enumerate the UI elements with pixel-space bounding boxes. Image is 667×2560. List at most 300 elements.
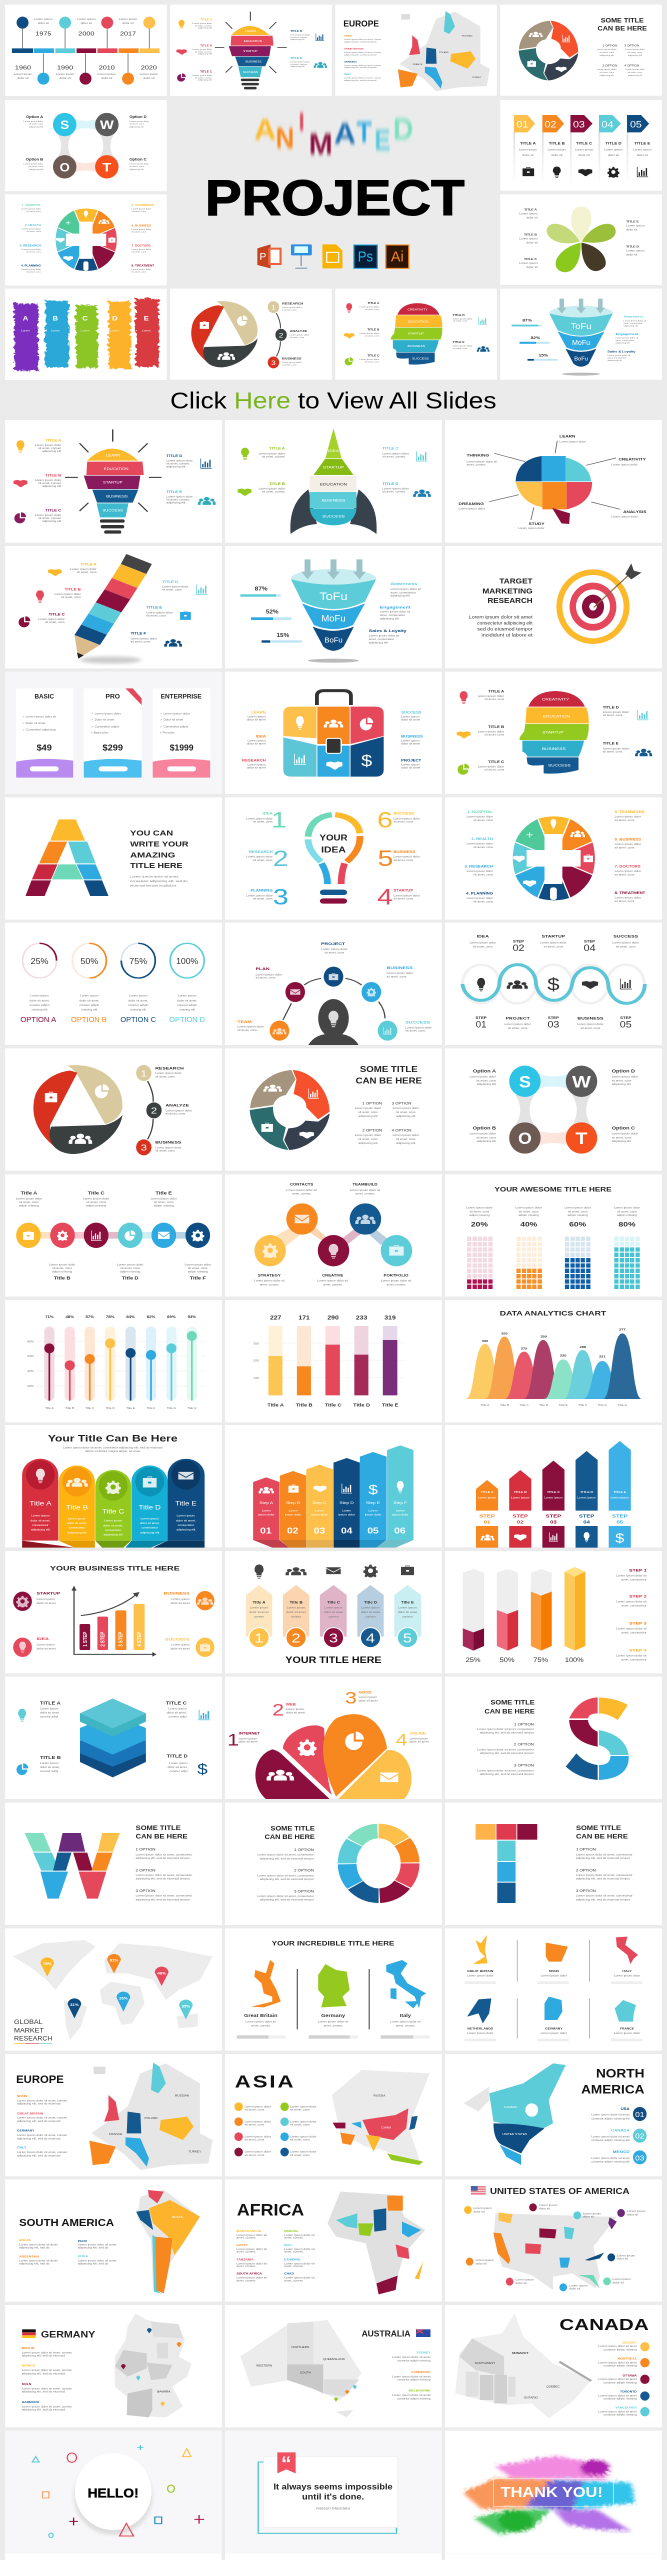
panel: petal diagram slide: Lorem ipsum xyxy=(519,261,538,265)
panel: 3D percentage bars: amet, consectetur xyxy=(621,1631,647,1634)
panel: ascending step columns: Step B xyxy=(286,1501,300,1505)
panel: your idea bulb: Lorem ipsum dolor xyxy=(246,817,273,820)
panel: wave steps: 02 xyxy=(513,943,525,954)
panel: rising arrows: 04 xyxy=(583,1520,590,1525)
panel: pricing table xyxy=(5,672,222,794)
panel: business growth chart: SUCCESS xyxy=(165,1637,190,1641)
panel: wave steps: STEP xyxy=(476,1016,487,1020)
growth chart: 1 STEP xyxy=(82,1631,89,1647)
panel: rounded tab columns: consectetur xyxy=(105,1528,121,1532)
panel: numbered arrow columns slide: 01 xyxy=(516,119,528,130)
panel: chain of circles: Title E xyxy=(156,1191,173,1196)
panel: rising arrows: $ xyxy=(615,1532,624,1546)
panel: person with idea arc xyxy=(225,923,442,1045)
panel: SWOT: T xyxy=(576,1130,588,1148)
panel: numbered arrow columns slide: 03 xyxy=(573,119,585,130)
legend: sit amet, cons xyxy=(245,2108,265,2112)
panel: ascending step columns: Lorem xyxy=(342,1509,352,1512)
panel: Canada map: TORONTO xyxy=(620,2390,637,2394)
state badges: dolor sit xyxy=(613,2281,624,2284)
panel: linked circles: amet, consec xyxy=(387,1283,406,1286)
panel: ascending step columns: ipsum dolor xyxy=(365,1513,381,1516)
panel: person with idea arc: sit amet, cons xyxy=(325,951,345,954)
panel: ascending step columns: Step D xyxy=(340,1501,354,1505)
panel: Europe map: GERMANY xyxy=(17,2129,34,2133)
panel: letter W infographic: adipiscing elit, sed do eiusmod tempor xyxy=(136,1856,190,1860)
panel: pencil infographic: Lorem ipsum dolor xyxy=(146,611,173,614)
panel: wave steps: Lorem ipsum dolor xyxy=(505,1022,531,1026)
growth chart: 3 STEP xyxy=(118,1631,125,1647)
panel: timeline slide: 2010 xyxy=(99,65,115,71)
Asia map shapes xyxy=(332,2070,430,2165)
panel: timeline slide: 2017 xyxy=(120,31,137,37)
panel: medical cross wheel: 8. TREATMENT xyxy=(615,891,646,895)
panel: three country maps: amet, consec xyxy=(251,2024,271,2027)
panel: letter S infographic: adipiscing elit, sed do eiusmod tempor xyxy=(480,1772,534,1776)
panel: timeline slide: dolor sit xyxy=(81,21,92,25)
panel: Africa map: AFRICA xyxy=(237,2202,304,2220)
panel: rising arrows: 02 xyxy=(517,1520,524,1525)
panel: triangle circle infographic: sit amet, cons xyxy=(155,1149,176,1153)
panel: numbered pentagon tabs: conetur xyxy=(328,1615,339,1618)
panel: target marketing research: sed do eiusmod tempor xyxy=(477,627,533,632)
panel: marketing funnel infographic: Lorem ipsum dolor sit xyxy=(380,610,411,614)
panel: rounded tab columns: adipiscing elit xyxy=(140,1531,160,1534)
panel: linked circles: Lorem ipsum dolor sit xyxy=(317,1279,348,1283)
next row sliver xyxy=(5,2547,661,2560)
panel: percentage rings: conetur adipin xyxy=(177,1003,198,1007)
panel: person with idea arc: sit amet, cons xyxy=(387,975,407,978)
panel: Germany map: BERLIN xyxy=(22,2346,34,2350)
panel: letter S infographic: Lorem ipsum dolor sit amet, consectetur xyxy=(477,1727,534,1731)
panel: rising arrows: TITLE A xyxy=(481,1490,494,1494)
panel: 3D percentage bars: Lorem ipsum dolor sit xyxy=(616,1654,647,1657)
panel: triangle circle infographic: ANALYZE xyxy=(165,1103,189,1108)
panel: ascending step columns: $ xyxy=(368,1483,378,1497)
panel: percentage rings: conetur adipin xyxy=(79,1003,100,1007)
panel: North America map: CANADA xyxy=(611,2129,630,2132)
North America map shapes: CANADA xyxy=(504,2105,517,2109)
panel: letter W infographic: 2 OPTION xyxy=(136,1869,156,1872)
panel: cloud petals: Lorem ipsum xyxy=(410,1737,429,1740)
panel: ascending step columns: 01 xyxy=(260,1526,272,1535)
panel: wave steps: IDEA xyxy=(477,934,490,939)
panel: six country maps: GERMANY xyxy=(545,2027,563,2030)
panel: Germany map: adipiscing elit, sed do eiusmod xyxy=(22,2390,65,2394)
panel: Africa map: amet, consec xyxy=(284,2236,304,2240)
panel: segmented donut: sit amet, cons xyxy=(396,1110,416,1114)
panel: numbered pentagon tabs: YOUR TITLE HERE xyxy=(285,1656,382,1666)
growth chart: 2 STEP xyxy=(100,1631,107,1647)
section: slides rows 5 to 8 xyxy=(5,923,662,1422)
panel: letter S infographic: CAN BE HERE xyxy=(485,1709,535,1715)
panel: light bulb infographic: adipiscing elit xyxy=(42,519,61,523)
panel: bar chart: 227 xyxy=(270,1315,282,1321)
small maps xyxy=(467,1935,638,2023)
panel: human head infographic: sit amet, cons xyxy=(484,768,505,772)
map pins xyxy=(40,1954,193,2019)
panel: quote slide: It always seems impossible xyxy=(274,2482,393,2491)
bulb shape: BUSINESS xyxy=(106,495,128,498)
panel: paint brush columns slide: C xyxy=(82,316,88,322)
head xyxy=(519,691,589,774)
panel: rocket infographic: TITLE B xyxy=(269,482,285,486)
head: CREATIVITY xyxy=(542,697,569,702)
panel: pricing table: $49 xyxy=(37,744,52,752)
panel: rounded tab columns: consectetur xyxy=(141,1526,158,1530)
North America map shapes: UNITED STATES xyxy=(502,2132,527,2136)
map pins: 35% xyxy=(182,2005,191,2008)
panel: segmented donut: Lorem ipsum dolor xyxy=(393,1133,419,1137)
head: STARTUP xyxy=(542,730,564,734)
heading: ANIMATED blurred letters xyxy=(254,109,413,160)
panel: Africa map: amet, consec xyxy=(284,2279,304,2282)
panel: human head infographic: TITLE D xyxy=(603,706,619,709)
panel: rounded tab columns: Title E xyxy=(175,1500,197,1507)
panel: Australia map: MELBOURNE xyxy=(409,2389,430,2393)
panel: North America map: consetur adipin missing elit xyxy=(591,2138,630,2142)
heading: ANIMATED blurred letters: A xyxy=(254,113,276,145)
panel: medical cross wheel: Lorem ipsum dolor xyxy=(615,815,641,819)
panel: pricing table: ✓ Consetetur adipis xyxy=(160,725,189,728)
panel: ascending step columns: ipsum dolor xyxy=(338,1513,355,1516)
panel: letter O ring: 3 OPTION xyxy=(294,1890,314,1893)
panel: percentage rings: missing elit xyxy=(81,1008,97,1012)
panel: rocket infographic: TITLE A xyxy=(269,447,285,451)
panel: puzzle brain infographic: amet, consec xyxy=(467,463,486,466)
panel: pencil infographic: TITLE E xyxy=(146,606,163,610)
panel: SWOT: Lorem ipsum dolor xyxy=(470,1075,496,1079)
panel: rounded tab columns: adipiscing elit xyxy=(176,1528,196,1532)
panel: petal diagram slide: dolor sit xyxy=(626,253,638,257)
panel: human head infographic: sit amet, cons xyxy=(484,733,505,737)
Europe map shapes xyxy=(89,2063,213,2170)
panel: pencil infographic: Lorem ipsum dolor xyxy=(54,592,81,596)
panel: Africa map: SOUTH AFRICA xyxy=(237,2272,263,2276)
heading: ANIMATED blurred letters: A xyxy=(334,117,356,149)
state badges xyxy=(464,2203,646,2291)
panel: waffle percentages: Lorem ipsum dolor xyxy=(516,1206,542,1210)
panel: waffle percentages: sit amet, cons xyxy=(470,1210,490,1213)
panel: marketing funnel infographic: amet, consectetur xyxy=(369,637,394,641)
panel: triangle circle infographic: 3 xyxy=(141,1144,147,1153)
panel: letter W infographic: adipiscing elit, sed do eiusmod tempor xyxy=(136,1877,190,1881)
panel: marketing funnel infographic: adipiscing elit xyxy=(369,641,388,644)
panel: numbered pentagon tabs: Title E xyxy=(401,1601,414,1604)
Canada map shapes: NUNAVUT xyxy=(512,2351,529,2355)
panel: 3D percentage bars: 100% xyxy=(565,1656,584,1664)
panel: puzzle brain infographic: THINKING xyxy=(467,453,489,458)
panel: global market research map: GLOBAL xyxy=(14,2018,43,2026)
panel: business growth chart: dolor sit amet xyxy=(37,1601,56,1605)
panel: Germany map: adipiscing elit, sed do eiusmod xyxy=(22,2354,65,2358)
panel: pencil infographic: TITLE F xyxy=(131,632,147,636)
panel: waffle percentages: 20% xyxy=(471,1221,488,1228)
ring xyxy=(347,1831,410,1896)
panel: medical cross wheel: sit amet, cons xyxy=(473,818,494,822)
panel: numbered arrow columns slide: TITLE D xyxy=(605,142,622,146)
panel: business growth chart: dolor sit amet xyxy=(171,1601,190,1605)
panel: percentage rings: OPTION A xyxy=(20,1015,57,1024)
panel: percentage rings: dolor sit amet, xyxy=(177,999,197,1002)
panel: rocket infographic: TITLE D xyxy=(382,482,399,486)
panel: petal diagram slide: TITLE B xyxy=(524,233,538,236)
panel: numbered arrow columns slide: dolor sit xyxy=(608,153,619,157)
panel: lollipop slider chart: Title B xyxy=(65,1406,74,1410)
panel: waffle percentages: Lorem ipsum dolor xyxy=(466,1206,493,1210)
panel: chain of circles: adipin missing xyxy=(52,1270,73,1274)
panel: Africa map: amet, consec xyxy=(237,2264,256,2268)
legend: sit amet, cons xyxy=(290,2108,310,2112)
panel: marketing funnel infographic: Sales & Loyalty xyxy=(369,629,407,633)
panel: Canada map xyxy=(445,2305,662,2427)
panel: paint brush columns slide: Lorem xyxy=(21,329,31,333)
panel: ascending step columns: 02 xyxy=(287,1526,298,1535)
panel: SWOT: sit amet, cons xyxy=(612,1136,632,1139)
Australia map shapes: WESTERN xyxy=(256,2364,272,2368)
panel: light bulb infographic: TITLE D xyxy=(166,454,183,458)
panel: numbered arrow columns slide: dolor sit xyxy=(551,153,563,157)
panel: triangle circle infographic: Lorem ipsum dolor xyxy=(165,1109,192,1112)
panel: wave steps: Lorem ipsum dolor xyxy=(540,941,567,944)
head: BUSINESS xyxy=(542,747,566,751)
panel: Europe map: Lorem ipsum dolor sit amet, consec xyxy=(17,2116,68,2120)
briefcase: $ xyxy=(361,752,372,769)
panel: rounded tab columns xyxy=(5,1425,222,1548)
panel: isometric layers: Lorem ipsum xyxy=(169,1761,188,1765)
letter S xyxy=(566,1697,629,1780)
pencil xyxy=(74,554,152,664)
panel: wave steps: STEP xyxy=(620,1016,632,1020)
panel: pricing table: ✓ Lorem ipsum dolor xyxy=(91,712,121,716)
panel: 3D percentage bars: 50% xyxy=(500,1656,515,1664)
panel: person with idea arc: Lorem ipsum dolor xyxy=(321,947,348,951)
heading: ANIMATED blurred letters: N xyxy=(276,122,294,154)
panel: medical cross wheel: sit amet, cons xyxy=(473,873,494,876)
panel: light bulb infographic xyxy=(5,420,222,543)
panel: isometric layers: dolor sit amet, xyxy=(40,1711,60,1715)
panel: timeline slide: dolor sit xyxy=(60,76,71,80)
panel: puzzle brain infographic: Lorem ipsum dolor sit xyxy=(467,460,497,463)
legend: sit amet, cons xyxy=(245,2153,265,2157)
progress bars: 52% xyxy=(266,610,279,615)
panel: letter W infographic: Lorem ipsum dolor sit amet, consectetur xyxy=(136,1873,192,1877)
panel: human head infographic: Lorem ipsum dolor xyxy=(478,694,504,698)
panel: your idea bulb: 5 xyxy=(378,847,393,871)
panel: person with idea arc: Lorem ipsum dolor xyxy=(387,971,413,975)
panel: bar chart: Title A xyxy=(267,1403,284,1408)
target with arrow xyxy=(556,563,641,644)
panel: segmented donut: adipiscing elit xyxy=(396,1141,416,1145)
panel: Africa map xyxy=(225,2179,442,2302)
panel: rounded tab columns: Lorem ipsum xyxy=(104,1519,123,1523)
Europe map shapes: POLAND xyxy=(144,2116,158,2120)
panel: Canada map: VANCOUVER xyxy=(615,2406,638,2410)
panel: pencil infographic xyxy=(5,546,222,668)
panel: Canada map: Lorem ipsum dolor sit amet xyxy=(598,2361,637,2364)
panel: Canada map: consetur adipin missing xyxy=(604,2381,637,2384)
panel: quote slide xyxy=(225,2431,442,2553)
panel: chain of circles: Lorem ipsum dolor xyxy=(185,1263,211,1266)
panel: Europe map: GREAT BRITAIN xyxy=(17,2112,43,2115)
panel: ascending step columns: 03 xyxy=(314,1526,325,1535)
panel: briefcase infographic: Lorem ipsum xyxy=(247,739,267,742)
panel: data analytics chart: Title B xyxy=(500,1403,509,1407)
panel: lollipop slider chart: Title H xyxy=(187,1406,196,1410)
panel: medical cross wheel: 1. HOSPITAL xyxy=(467,810,494,814)
panel: numbered pentagon tabs: conetur xyxy=(402,1615,413,1618)
bulb shape: STARTUP xyxy=(103,481,123,484)
panel: numbered arrow columns slide: Lorem ipsum xyxy=(548,148,567,152)
panel: SWOT: adipiscing elit xyxy=(612,1082,631,1086)
panel: isometric layers: dolor sit amet, xyxy=(168,1765,188,1769)
panel: data analytics chart: Title G xyxy=(598,1403,608,1407)
panel: your idea bulb: Lorem ipsum dolor xyxy=(393,855,420,859)
panel: paint brush columns slide: Lorem xyxy=(142,329,152,333)
letter W xyxy=(25,1833,120,1899)
panel: Germany map: Lorem ipsum dolor sit amet, consec xyxy=(22,2351,73,2354)
panel: Canada map: Lorem ipsum dolor sit amet xyxy=(598,2344,637,2348)
panel: chain of circles: sit amet, cons xyxy=(120,1266,141,1270)
Australia map shapes: NORTHERN xyxy=(291,2345,309,2349)
panel: 3D percentage bars: 25% xyxy=(466,1656,481,1664)
panel: Australia map: AUSTRALIA xyxy=(362,2330,411,2338)
legend: Lorem ipsum dolor xyxy=(290,2150,317,2154)
panel: pencil infographic: sit amet, cons xyxy=(146,614,167,617)
panel: Canada map: MONTREAL xyxy=(618,2357,637,2361)
panel: chain of circles xyxy=(5,1174,222,1297)
Canada map shapes: NORTHWEST xyxy=(475,2361,495,2365)
legend: sit amet, cons xyxy=(290,2153,310,2157)
panel: numbered pentagon tabs: conetur xyxy=(291,1615,301,1618)
panel: cloud petals: 1 xyxy=(227,1731,239,1750)
panel: three country maps xyxy=(225,1928,442,2051)
panel: rounded tab columns: dolor sit amet, xyxy=(103,1524,123,1527)
panel: Europe map: ITALY xyxy=(17,2146,26,2150)
panel: isometric layers xyxy=(5,1677,222,1799)
panel: target marketing research: incididunt ut labore et xyxy=(482,633,533,638)
panel: Africa map: amet, consec xyxy=(284,2250,304,2254)
panel: segmented donut: sit amet, cons xyxy=(358,1110,378,1114)
panel: waffle percentages: sit amet, cons xyxy=(617,1210,637,1213)
panel: business growth chart: Lorem ipsum xyxy=(171,1643,190,1647)
icons: software logos: Ps xyxy=(358,249,373,265)
panel: waffle percentages: YOUR AWESOME TITLE HERE xyxy=(495,1186,611,1193)
panel: puzzle brain infographic: Lorem ipsum dolor xyxy=(459,507,485,511)
panel: chain of circles: sit amet, cons xyxy=(19,1200,39,1204)
panel: numbered arrow columns slide: dolor sit xyxy=(522,153,534,157)
panel: linked circles: CONTACTS xyxy=(290,1183,314,1187)
panel: linked circles: Lorem ipsum dolor sit xyxy=(286,1188,317,1192)
panel: South America map: CHILE xyxy=(78,2254,88,2258)
panel: triangle circle infographic: 2 xyxy=(151,1107,158,1116)
panel: 3D percentage bars: STEP 4 xyxy=(629,1648,647,1652)
panel: South America map: Lorem ipsum dolor sit amet xyxy=(19,2259,58,2263)
panel: six country maps: Lorem ipsum dolor xyxy=(467,2031,493,2035)
panel: marketing funnel infographic: Awareness xyxy=(391,582,418,586)
panel: chain of circles: Title C xyxy=(88,1191,105,1196)
panel: human head infographic: TITLE B xyxy=(488,725,504,729)
panel: rounded tab columns: consectetur xyxy=(32,1523,49,1527)
panel: Africa map: Lorem ipsum dolor sit xyxy=(284,2262,315,2265)
legend: sit amet, cons xyxy=(290,2138,310,2142)
panel: bar chart: 300 xyxy=(253,1342,259,1345)
panel: light bulb infographic: TITLE E xyxy=(166,490,183,494)
panel: waffle percentages: sit amet, cons xyxy=(519,1210,539,1213)
panel: rounded tab columns: Title D xyxy=(139,1504,161,1511)
panel: segmented donut: 2 OPTION xyxy=(362,1129,382,1132)
panel: Australia map: consetur adipin missing xyxy=(397,2359,431,2362)
panel: business growth chart: BUSINESS xyxy=(164,1591,190,1595)
panel: pencil infographic: sit amet, cons xyxy=(131,640,151,643)
panel: light bulb infographic: TITLE B xyxy=(45,474,62,477)
panel: letter T infographic: adipiscing elit, sed do eiusmod tempor xyxy=(576,1898,630,1901)
panel: isometric layers: TITLE C xyxy=(166,1701,187,1706)
letter T xyxy=(476,1824,537,1903)
panel: your idea bulb: 3 xyxy=(273,885,289,910)
panel: letter W infographic: 1 OPTION xyxy=(136,1848,156,1852)
panel: wave steps: sit amet, cons xyxy=(508,1026,528,1030)
panel: numbered arrow columns slide: 04 xyxy=(601,119,613,130)
panel: timeline slide: dolor sit xyxy=(122,21,134,25)
panel: your idea bulb: YOUR xyxy=(319,834,348,843)
panel: lollipop slider chart: 62% xyxy=(147,1315,156,1319)
panel: Asia map xyxy=(225,2054,442,2176)
panel: linked circles: Lorem ipsum dolor sit xyxy=(254,1279,285,1283)
panel: chain of circles: Lorem ipsum dolor xyxy=(117,1263,143,1266)
panel: South America map: Lorem ipsum dolor sit amet xyxy=(78,2259,116,2263)
panel: cloud petals xyxy=(225,1677,442,1799)
panel: light bulb infographic: sit amet, consec xyxy=(38,516,62,520)
panel: 3D percentage bars: amet, consectetur xyxy=(621,1604,647,1608)
panel: numbered pentagon tabs: Title D xyxy=(364,1601,377,1604)
panel: six country maps: Lorem ipsum dolor xyxy=(614,1974,640,1978)
panel: cloud petals: dolor sit amet xyxy=(286,1711,305,1714)
brain puzzle xyxy=(516,456,592,524)
panel: percentage rings: dolor sit amet, xyxy=(30,999,50,1002)
panel: rounded tab columns: Lorem ipsum dolor sit amet, consetetur adipiscing elit, sed do eiusmod xyxy=(63,1446,163,1449)
panel: rocket infographic: Lorem ipsum dolor xyxy=(382,452,409,455)
panel: waffle percentages: adipin missing xyxy=(568,1213,588,1217)
panel: your idea bulb: sit amet, cons xyxy=(253,820,273,824)
growth chart xyxy=(71,1586,157,1657)
panel: numbered pentagon tabs: Lorem ipsum xyxy=(287,1606,306,1610)
panel: linked circles: amet, consec xyxy=(323,1283,343,1286)
legend: Lorem ipsum dolor xyxy=(245,2150,271,2154)
legend: sit amet, cons xyxy=(245,2138,265,2142)
panel: bar chart: Title D xyxy=(353,1403,370,1408)
panel: waffle percentages: Lorem ipsum dolor xyxy=(564,1206,591,1210)
panel: timeline slide: dolor sit xyxy=(17,76,29,80)
panel: 3D percentage bars: STEP 2 xyxy=(629,1594,647,1599)
panel: isometric layers: Lorem ipsum xyxy=(168,1707,187,1711)
panel: linked circles: TEAMBUILD xyxy=(352,1183,378,1187)
panel: puzzle brain infographic: Lorem ipsum dolor xyxy=(518,526,545,530)
panel: timeline slide: Lorem ipsum xyxy=(34,17,53,21)
panel: light bulb infographic: sit amet, consec xyxy=(38,446,62,450)
panel: timeline slide: Lorem ipsum xyxy=(119,17,138,21)
panel: pricing table: $299 xyxy=(103,744,123,752)
panel: USA map xyxy=(445,2179,662,2302)
panel: puzzle brain infographic xyxy=(445,420,662,543)
panel: Africa map: amet, consec xyxy=(237,2250,256,2254)
panel: thank you slide: THANK YOU! xyxy=(501,2484,603,2500)
petals xyxy=(255,1714,412,1799)
panel: target marketing research: TARGET xyxy=(499,578,533,585)
panel: waffle percentages xyxy=(445,1174,662,1297)
bulb shape: LEARN xyxy=(106,454,120,458)
panel: pencil infographic: sit amet, cons xyxy=(162,588,182,592)
